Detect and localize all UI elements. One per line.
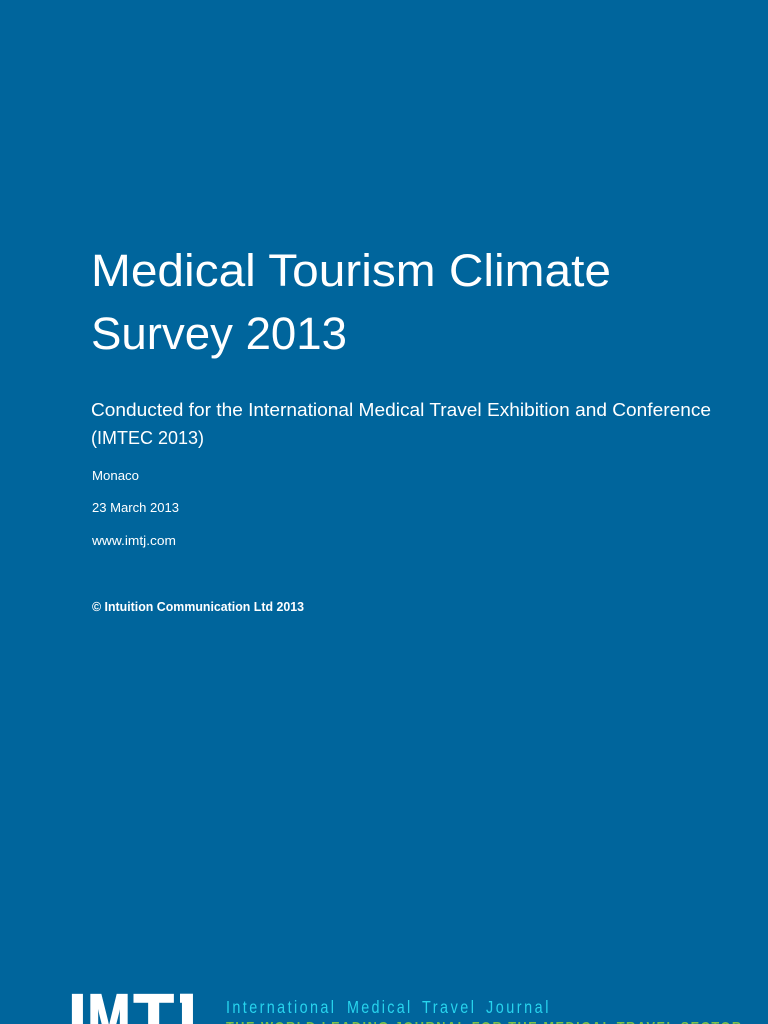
location: Monaco	[92, 469, 139, 483]
date: 23 March 2013	[92, 501, 179, 515]
title: Medical Tourism Climate	[91, 245, 611, 296]
subtitle: Conducted for the International Medical Travel Exhibition and Conference	[91, 399, 711, 420]
logo name: International	[226, 998, 334, 1017]
copyright: © Intuition Communication Ltd 2013	[92, 600, 304, 614]
logo name: Medical	[347, 998, 410, 1017]
subtitle	[91, 399, 711, 448]
logo name: Journal	[486, 998, 548, 1017]
title: Survey 2013	[91, 308, 347, 359]
logo name	[226, 998, 548, 1017]
website: www.imtj.com	[91, 534, 176, 548]
logo: IMTJ	[72, 994, 193, 1024]
cover page	[72, 253, 740, 1024]
title	[91, 245, 611, 359]
subtitle: (IMTEC 2013)	[91, 427, 204, 448]
logo name: Travel	[422, 998, 474, 1017]
